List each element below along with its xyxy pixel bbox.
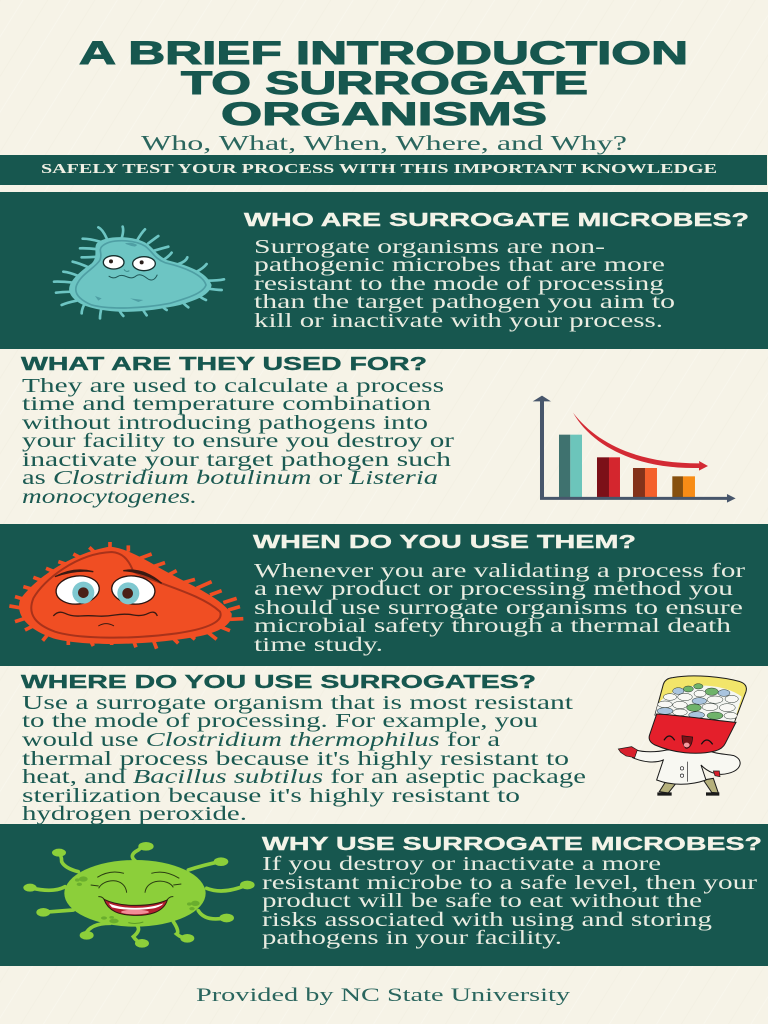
text: what: without introducing pathogens into <box>22 412 428 434</box>
text: who: resistant to the mode of processing <box>254 273 664 295</box>
text: why <box>262 853 757 949</box>
text: who: Surrogate organisms are non- <box>254 236 605 258</box>
title: A BRIEF INTRODUCTION <box>79 35 688 71</box>
text: where: to the mode of processing. For example, you <box>22 710 538 732</box>
text: where: thermal process because it's highly resistant to <box>22 748 569 770</box>
heading: why: WHY USE SURROGATE MICROBES? <box>262 834 762 854</box>
text: when: Whenever you are validating a process for <box>254 560 745 582</box>
text: what: your facility to ensure you destroy or <box>22 430 454 452</box>
text: when <box>254 560 745 656</box>
text: what: They are used to calculate a process <box>22 375 444 397</box>
icon: teal microbe <box>54 227 224 318</box>
text: who: than the target pathogen you aim to <box>254 291 675 313</box>
banner <box>0 155 767 185</box>
subtitle: Who, What, When, Where, and Why? <box>141 131 627 155</box>
text: who <box>254 236 675 332</box>
text: what: inactivate your target pathogen such <box>22 449 451 471</box>
text: why: If you destroy or inactivate a more <box>262 853 661 875</box>
text: when: should use surrogate organisms to ensure <box>254 597 743 619</box>
chart: declining bars <box>533 396 736 503</box>
text: why: risks associated with using and storing <box>262 909 712 931</box>
text: where: heat, and Bacillus subtilus for an aseptic package <box>22 766 586 788</box>
text: why: product will be safe to eat without the <box>262 890 702 912</box>
heading: who: WHO ARE SURROGATE MICROBES? <box>244 210 749 230</box>
panel: where <box>21 672 746 825</box>
text: what <box>22 375 454 508</box>
text: why: pathogens in your facility. <box>262 927 562 949</box>
text: what: as Clostridium botulinum or Listeria <box>22 467 438 489</box>
banner: SAFELY TEST YOUR PROCESS WITH THIS IMPORTANT KNOWLEDGE <box>41 162 717 177</box>
panel: what <box>21 354 736 508</box>
icon: green microbe <box>23 842 255 948</box>
text: where: hydrogen peroxide. <box>22 803 247 825</box>
title: ORGANISMS <box>221 96 547 132</box>
title: TO SURROGATE <box>181 65 588 101</box>
footer: Provided by NC State University <box>196 985 571 1006</box>
text: where: would use Clostridium thermophilus for a <box>22 729 500 751</box>
panel: when <box>0 524 768 666</box>
icon: red microbe <box>9 542 243 649</box>
text: why: resistant microbe to a safe level, then your <box>262 872 757 894</box>
text: what: monocytogenes. <box>22 486 197 508</box>
title <box>79 35 688 132</box>
text: where <box>22 692 586 825</box>
icon: pill character <box>618 676 746 796</box>
panel: who <box>0 192 768 349</box>
text: what: time and temperature combination <box>22 393 431 415</box>
heading: what: WHAT ARE THEY USED FOR? <box>21 354 427 374</box>
text: when: microbial safety through a thermal death <box>254 615 731 637</box>
text: where: sterilization because it's highly resistant to <box>22 785 520 807</box>
heading: where: WHERE DO YOU USE SURROGATES? <box>21 672 536 692</box>
heading: when: WHEN DO YOU USE THEM? <box>253 532 636 552</box>
panel: why <box>0 824 768 966</box>
text: when: a new product or processing method you <box>254 578 733 600</box>
text: who: pathogenic microbes that are more <box>254 254 665 276</box>
text: who: kill or inactivate with your process. <box>254 310 663 332</box>
text: where: Use a surrogate organism that is most resistant <box>22 692 574 714</box>
text: when: time study. <box>254 634 383 656</box>
